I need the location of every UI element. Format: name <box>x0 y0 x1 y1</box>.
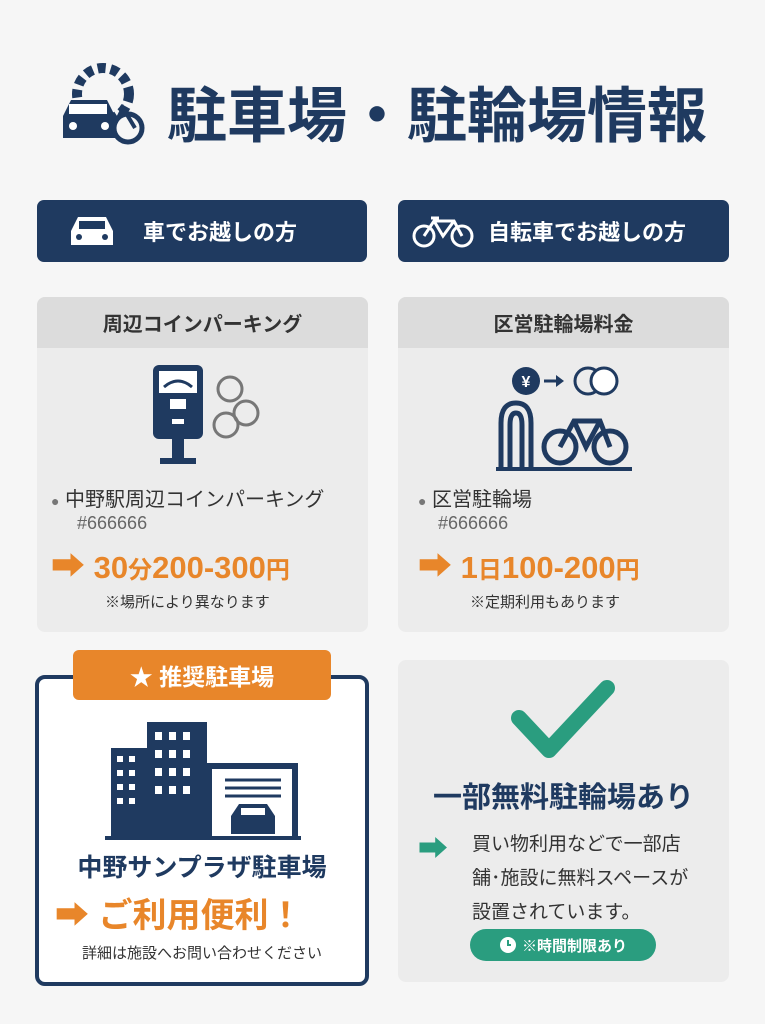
header: car: 車でお越しの方 <box>143 220 297 245</box>
panel: ward bicycle parking <box>398 297 729 632</box>
title <box>63 63 707 150</box>
note: 詳細は施設へお問い合わせください <box>82 945 322 962</box>
icon: car and bicycle with gear <box>63 63 144 144</box>
price: ➡ 30分200-300円 <box>51 548 290 586</box>
icon: clock <box>500 937 516 953</box>
badge: time limit: ※時間制限あり <box>522 938 627 954</box>
icon: checkmark <box>511 680 615 758</box>
description: ➡ <box>418 833 448 866</box>
convenience callout: ➡ ご利用便利！ <box>55 897 302 935</box>
icon: car <box>71 217 113 245</box>
header: bicycle <box>398 200 729 262</box>
list item text: ● 中野駅周辺コインパーキング <box>51 489 324 511</box>
list item text: ● 区営駐輪場 <box>418 489 532 511</box>
badge: time limit <box>470 929 656 961</box>
icon: buildings with garage <box>105 722 301 840</box>
panel heading: 区営駐輪場料金 <box>494 314 634 336</box>
note: ※定期利用もあります <box>470 594 620 611</box>
title text: 駐車場・駐輪場情報 <box>167 83 707 150</box>
panel: coin parking <box>37 297 368 632</box>
panel heading <box>398 297 729 348</box>
note: ※場所により異なります <box>105 594 270 611</box>
heading: 一部無料駐輪場あり <box>433 782 694 814</box>
icon: yen to coins, bike rack: ¥ <box>522 374 531 391</box>
panel: coin parking: #666666 <box>77 513 147 533</box>
description: 買い物利用などで一部店舗･施設に無料スペースが設置されています。 <box>472 834 688 923</box>
orange tab: ★ 推奨駐車場 <box>130 664 274 690</box>
panel heading <box>37 297 368 348</box>
icon: parking meter with coins <box>153 365 260 464</box>
panel heading: 周辺コインパーキング <box>103 314 302 336</box>
orange tab <box>73 650 331 700</box>
header: bicycle: 自転車でお越しの方 <box>488 220 686 245</box>
icon: bicycle <box>412 216 474 248</box>
facility name: 中野サンプラザ駐車場 <box>77 854 327 882</box>
price: ➡ 1日100-200円 <box>418 548 640 586</box>
header: car <box>37 200 367 262</box>
panel: recommended parking <box>35 650 369 986</box>
panel: free bicycle parking <box>398 660 729 982</box>
panel: ward bicycle parking: #666666 <box>438 513 508 533</box>
icon: yen to coins, bike rack <box>496 366 632 471</box>
